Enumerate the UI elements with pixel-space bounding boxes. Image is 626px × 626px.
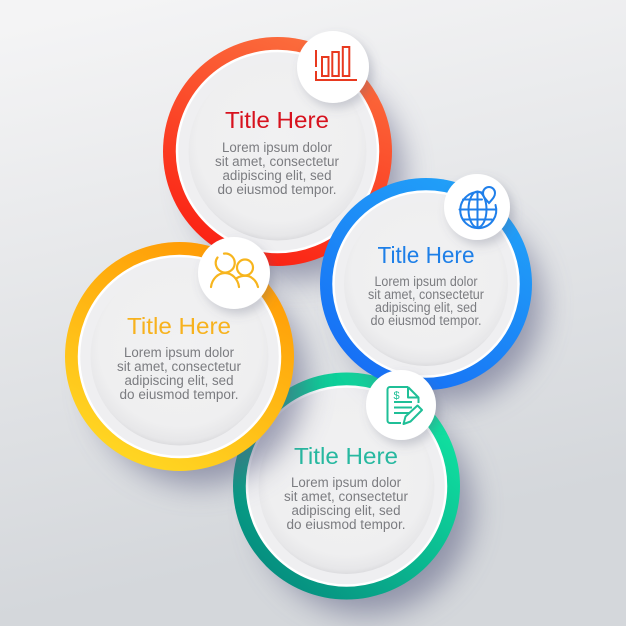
text block: yellow: Lorem ipsum dolor <box>124 345 234 360</box>
text block: red: adipiscing elit, sed <box>222 168 332 183</box>
text block: red: do eiusmod tempor. <box>218 182 336 197</box>
icon: document badge <box>366 370 436 440</box>
text block: yellow: adipiscing elit, sed <box>124 373 234 388</box>
text block: blue: sit amet, consectetur <box>368 287 484 302</box>
title: green: Title Here <box>294 443 398 469</box>
panel: yellow circle <box>65 242 305 485</box>
title: yellow: Title Here <box>127 313 231 339</box>
icon: dollar sign: $ <box>393 390 400 402</box>
text block: green: sit amet, consectetur <box>284 489 408 504</box>
text block: yellow <box>117 345 241 402</box>
text block: blue <box>368 274 484 328</box>
title: blue: Title Here <box>378 242 474 268</box>
text block: blue: do eiusmod tempor. <box>370 313 482 328</box>
text block: blue: Lorem ipsum dolor <box>374 274 478 289</box>
panel: green circle <box>233 372 472 614</box>
panel: red circle <box>163 37 403 280</box>
text block: yellow: sit amet, consectetur <box>117 359 241 374</box>
text block: yellow: do eiusmod tempor. <box>120 387 238 402</box>
text block: green: adipiscing elit, sed <box>292 503 400 518</box>
text block: green: do eiusmod tempor. <box>286 517 406 532</box>
text block: red: sit amet, consectetur <box>215 154 339 169</box>
text block: blue: adipiscing elit, sed <box>375 300 477 315</box>
text block: red <box>215 140 339 197</box>
text block: green <box>284 475 408 532</box>
icon: globe badge <box>444 174 510 240</box>
title: red: Title Here <box>225 107 329 133</box>
icon: bar chart badge <box>297 31 369 103</box>
icon: people badge <box>198 237 270 309</box>
panel: blue circle <box>320 178 542 403</box>
text block: red: Lorem ipsum dolor <box>222 140 332 155</box>
text block: green: Lorem ipsum dolor <box>291 475 401 490</box>
